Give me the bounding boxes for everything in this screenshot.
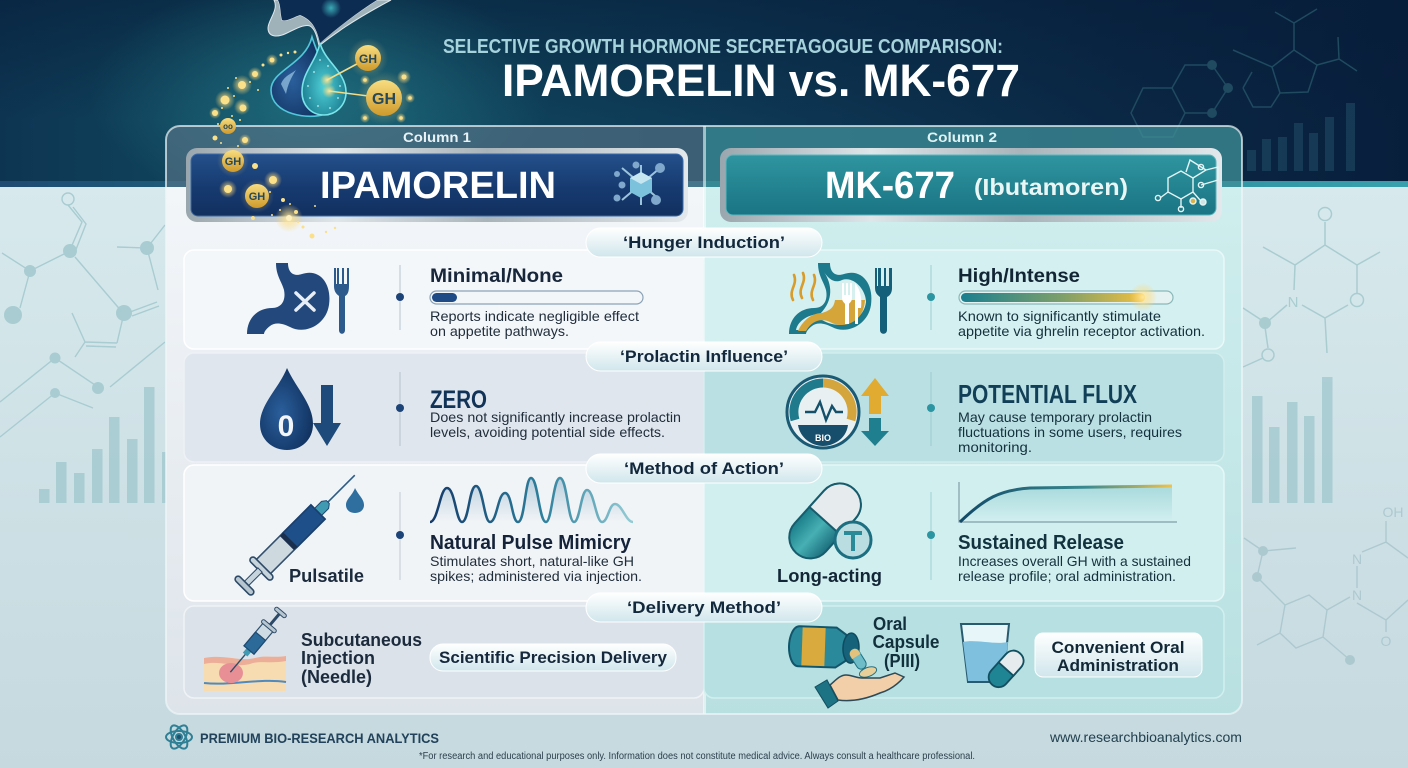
header bar: MK-677: MK-677 xyxy=(825,165,955,207)
label: Pulsatile xyxy=(289,566,364,586)
row panel: prolactin left xyxy=(184,353,704,462)
badge: Scientific Precision Delivery xyxy=(439,648,668,667)
icon: crystal molecule xyxy=(614,162,665,205)
background molecule: right lower: OH xyxy=(1382,504,1404,520)
icon: GH bead middle: GH xyxy=(225,156,241,168)
description: Stimulates short, natural-like GH xyxy=(430,553,634,569)
label xyxy=(301,630,422,687)
verdict: POTENTIAL FLUX xyxy=(958,379,1138,409)
row panel: delivery left xyxy=(184,605,704,698)
label xyxy=(872,614,940,671)
label: (PIII) xyxy=(884,651,920,671)
label: (Needle) xyxy=(301,667,372,687)
description xyxy=(430,409,681,440)
background molecule: right upper: N xyxy=(1288,294,1298,311)
pill: prolactin influence xyxy=(586,342,822,371)
hero illustration: hormone droplets xyxy=(209,0,415,238)
description: release profile; oral administration. xyxy=(958,568,1176,584)
icon: GH bead middle xyxy=(217,145,249,177)
description: spikes; administered via injection. xyxy=(430,568,642,584)
label: Subcutaneous xyxy=(301,630,422,650)
icon: GH molecule small xyxy=(348,38,388,78)
footer xyxy=(166,723,1242,762)
label: Injection xyxy=(301,648,375,668)
description: Known to significantly stimulate xyxy=(958,308,1161,324)
dark funnel xyxy=(278,0,377,43)
background chart: left bars xyxy=(39,387,168,503)
divider with dot xyxy=(396,265,404,330)
row panel: prolactin right xyxy=(704,353,1224,462)
icon: drop with zero and down arrow xyxy=(260,368,341,450)
description xyxy=(958,308,1205,339)
divider with dot xyxy=(927,372,935,446)
icon: GH molecule small: GH xyxy=(359,52,377,66)
gauge bar high xyxy=(959,283,1173,311)
row panel: method left xyxy=(184,465,704,601)
connector lines xyxy=(327,58,384,98)
website: www.researchbioanalytics.com xyxy=(1049,729,1242,745)
disclaimer: *For research and educational purposes only. Information does not constitute medical advice. Always consult a healthcare professional. xyxy=(419,751,975,762)
badge: Administration xyxy=(1057,656,1179,675)
column label 2: Column 2 xyxy=(927,130,997,145)
header bar: MK-677 xyxy=(720,148,1222,222)
label: Capsule xyxy=(872,632,940,652)
pill: delivery method: ‘Delivery Method’ xyxy=(627,598,781,617)
connector nodes xyxy=(320,73,336,98)
main title: IPAMORELIN vs. MK-677 xyxy=(502,55,1020,106)
icon: capsule and tablet xyxy=(781,475,871,567)
pill: hunger induction xyxy=(586,228,822,257)
navy drop xyxy=(271,37,325,116)
verdict: Minimal/None xyxy=(430,266,563,287)
icon: stomach with X and fork xyxy=(247,263,349,334)
background: lower xyxy=(0,184,1408,768)
background molecule: right lower: O xyxy=(1381,633,1392,649)
description: Does not significantly increase prolactin xyxy=(430,409,681,425)
icon: GH bead lower xyxy=(240,179,274,213)
icon: gauge with arrows xyxy=(787,376,889,448)
icon: GH molecule large: GH xyxy=(372,91,396,108)
divider with dot xyxy=(927,492,935,580)
icon: drop with zero and down arrow: 0 xyxy=(278,410,294,443)
funnel spark xyxy=(321,0,341,18)
row panel: hunger right xyxy=(704,250,1224,349)
background molecule: right lower xyxy=(1244,504,1408,665)
label: Long-acting xyxy=(777,566,882,586)
brand: PREMIUM BIO-RESEARCH ANALYTICS xyxy=(200,730,439,746)
background molecule: right lower: N xyxy=(1352,587,1362,603)
badge xyxy=(1035,633,1202,677)
teal drop bubbles xyxy=(307,59,341,109)
pill: prolactin influence: ‘Prolactin Influence’ xyxy=(620,347,788,366)
description: fluctuations in some users, requires xyxy=(958,424,1182,440)
icon: bottle and hand xyxy=(788,626,904,708)
description: on appetite pathways. xyxy=(430,323,569,339)
icon: atom logo xyxy=(166,723,192,751)
gauge bar low xyxy=(430,291,643,304)
row panel: delivery right xyxy=(704,606,1224,708)
description: levels, avoiding potential side effects. xyxy=(430,424,665,440)
icon: GH molecule large xyxy=(357,71,411,125)
description: Increases overall GH with a sustained xyxy=(958,553,1191,569)
icon: stomach with steam and cutlery xyxy=(789,263,892,334)
teal drop xyxy=(302,43,346,115)
header molecule: right xyxy=(1131,9,1357,137)
badge: Convenient Oral xyxy=(1052,638,1184,657)
pill: delivery method xyxy=(586,593,822,622)
badge xyxy=(430,644,676,671)
background molecule: right upper xyxy=(1243,208,1380,367)
description xyxy=(958,553,1191,584)
description xyxy=(430,308,639,339)
pill: method of action xyxy=(586,454,822,483)
panel backgrounds xyxy=(166,126,1242,714)
description: appetite via ghrelin receptor activation. xyxy=(958,323,1205,339)
row panel: hunger left xyxy=(184,250,704,349)
icon: GH bead lower: GH xyxy=(249,191,265,203)
icon: syringe xyxy=(232,465,365,598)
row panel: method right xyxy=(704,465,1224,601)
background chart: header bars xyxy=(1247,103,1355,171)
background chart: right bars xyxy=(1252,377,1332,503)
verdict: High/Intense xyxy=(958,266,1080,287)
verdict: Natural Pulse Mimicry xyxy=(430,532,632,554)
pill: hunger induction: ‘Hunger Induction’ xyxy=(623,233,785,252)
description xyxy=(958,409,1182,455)
icon: small glowing bead xyxy=(220,118,236,134)
description xyxy=(430,553,642,584)
pill: method of action: ‘Method of Action’ xyxy=(624,459,784,478)
divider with dot xyxy=(396,372,404,446)
description: monitoring. xyxy=(958,439,1032,455)
description: Reports indicate negligible effect xyxy=(430,308,639,324)
column label 1: Column 1 xyxy=(403,130,472,145)
description: May cause temporary prolactin xyxy=(958,409,1152,425)
panel: comparison table xyxy=(166,126,1242,714)
label: Oral xyxy=(873,614,907,634)
background: header band xyxy=(0,0,1408,182)
header bar: Ipamorelin xyxy=(186,148,688,222)
icon: structural formula xyxy=(1155,160,1218,212)
title block xyxy=(443,35,1020,106)
subtitle: SELECTIVE GROWTH HORMONE SECRETAGOGUE COMPARISON: xyxy=(443,35,1003,58)
verdict: ZERO xyxy=(430,386,487,414)
chart: pulse wave xyxy=(430,478,633,522)
header glow xyxy=(90,0,550,215)
divider with dot xyxy=(927,265,935,330)
background: header top shade xyxy=(0,0,1408,120)
navy drop highlight xyxy=(281,70,296,94)
glass ribbon xyxy=(268,0,391,46)
icon: skin injection xyxy=(204,605,289,691)
header lower stripe xyxy=(0,181,1408,187)
sparkle trail xyxy=(209,50,415,238)
icon: small glowing bead: oo xyxy=(223,122,233,131)
background molecule: right lower: N xyxy=(1352,551,1362,567)
verdict: Sustained Release xyxy=(958,532,1124,554)
icon: water glass with capsule xyxy=(961,624,1027,691)
divider with dot xyxy=(396,492,404,580)
header bar: Ipamorelin: IPAMORELIN xyxy=(320,165,556,207)
icon: gauge with arrows: BIO xyxy=(815,433,831,443)
chart: sustained release curve xyxy=(959,482,1177,522)
background molecule: left xyxy=(0,193,165,437)
header bar: MK-677: (Ibutamoren) xyxy=(974,174,1128,200)
